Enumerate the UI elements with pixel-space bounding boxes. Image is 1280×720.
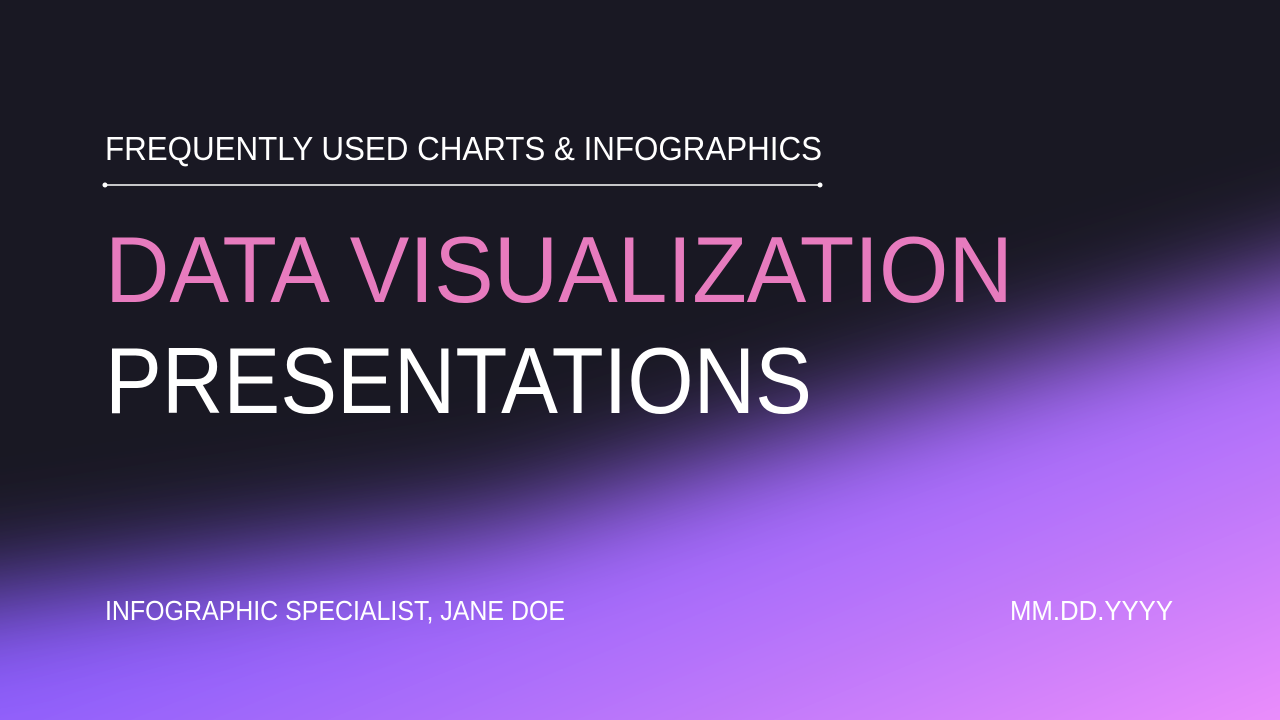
date: MM.DD.YYYY [1010, 595, 1173, 626]
background gradient band [0, 220, 1280, 720]
title: presentations: PRESENTATIONS [105, 328, 812, 433]
divider line with end dots [102, 182, 822, 188]
subtitle: FREQUENTLY USED CHARTS & INFOGRAPHICS [105, 130, 822, 167]
presenter name: INFOGRAPHIC SPECIALIST, JANE DOE [105, 595, 565, 626]
title: data visualization: DATA VISUALIZATION [105, 217, 1013, 322]
